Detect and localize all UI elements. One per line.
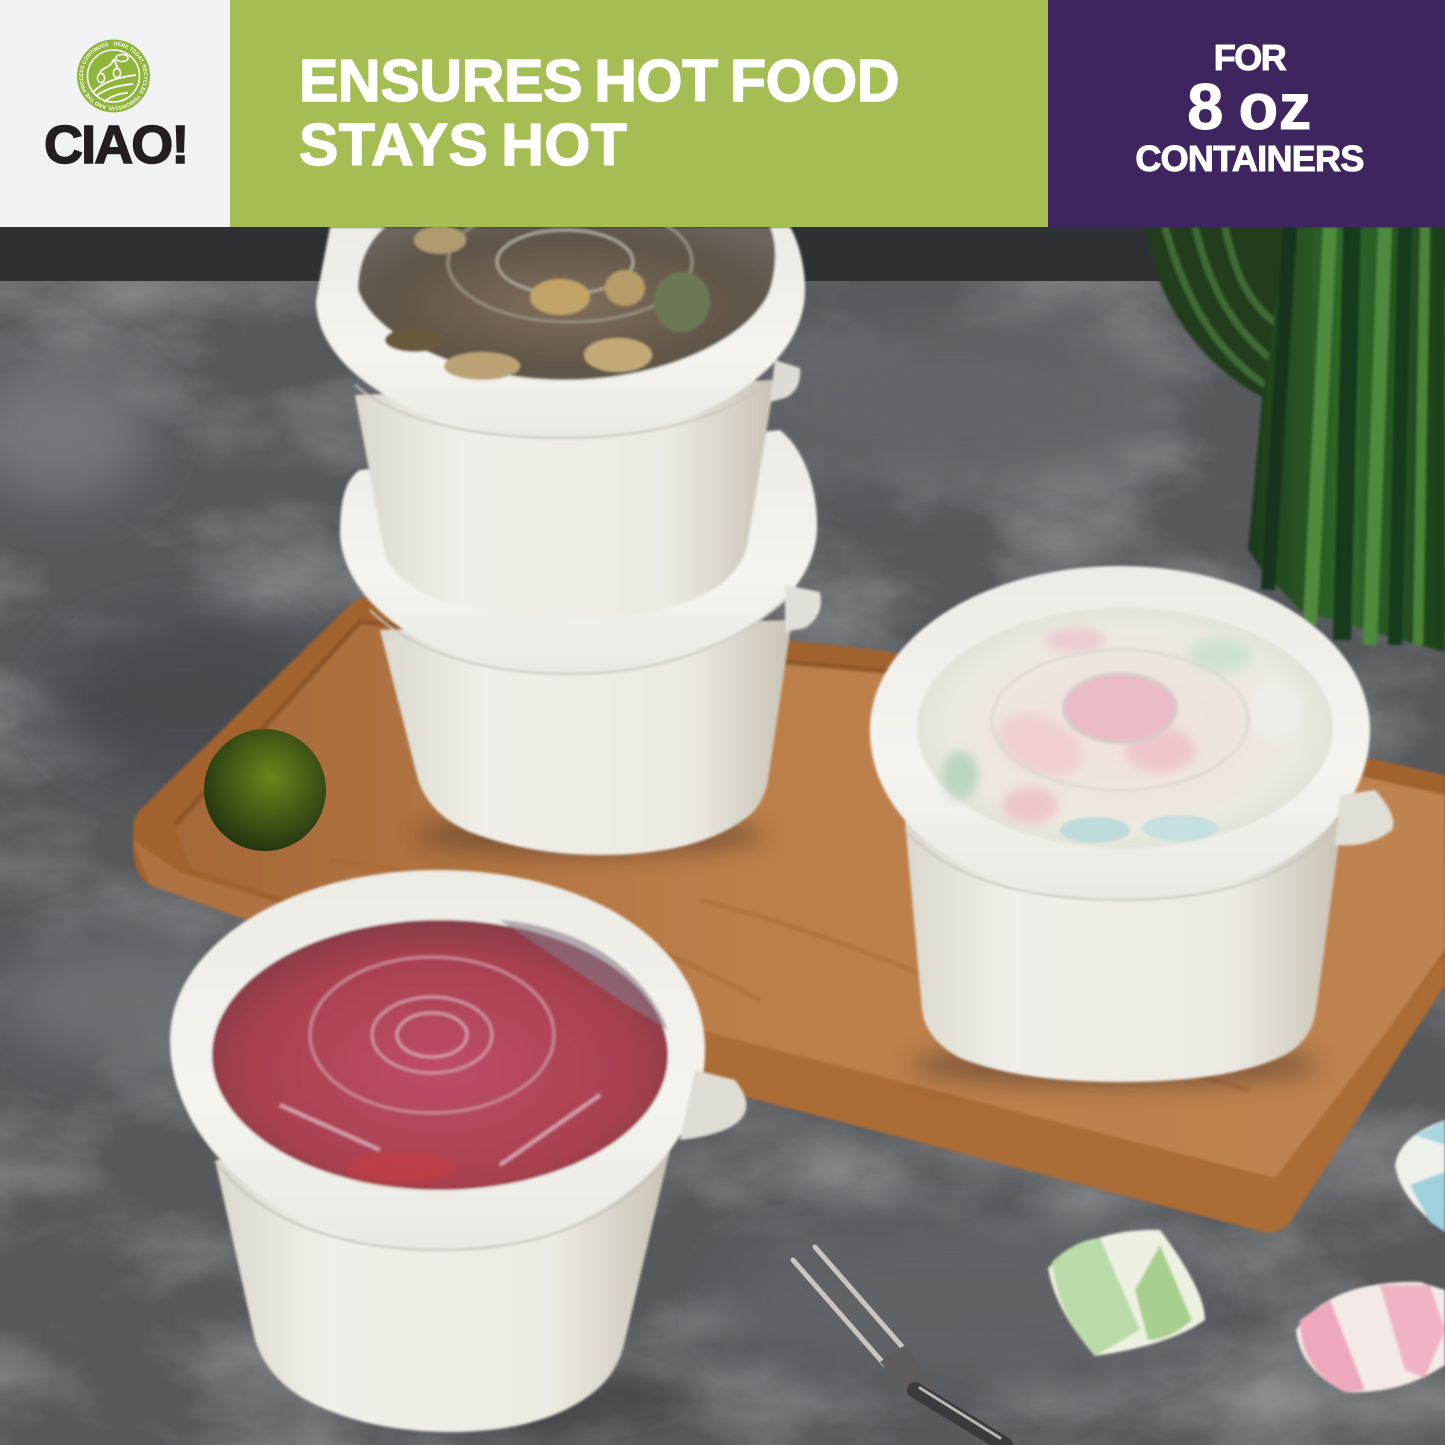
marshmallow: pink: [1296, 1282, 1445, 1392]
size text: CONTAINERS: [1135, 138, 1364, 179]
size text: 8 oz: [1187, 70, 1312, 143]
size panel: [1048, 0, 1445, 227]
wooden tray: [133, 597, 1445, 1232]
fork: [793, 1247, 1005, 1445]
dark wall strip behind table: [0, 227, 1445, 281]
bowl: front with red fruit: [170, 870, 746, 1432]
shadows under bowls: [390, 815, 1320, 1429]
bowl: right with marshmallows: [870, 566, 1393, 1082]
header band: [0, 0, 1445, 227]
logo panel: [0, 0, 230, 227]
green ball: [204, 729, 326, 851]
cactus plant: [1145, 227, 1445, 652]
headline panel: [230, 0, 1048, 227]
headline: [299, 48, 899, 178]
bowl: top stacked: [316, 202, 805, 618]
marshmallow: edge: [1395, 1120, 1445, 1232]
size text: FOR: [1214, 37, 1285, 78]
logo badge: HERE TODAY, RECYCLED TOMORROW, AND THE PROCESS CONTINUES: [79, 42, 148, 110]
size text: [1135, 37, 1364, 179]
bowl: second stacked: [340, 430, 821, 855]
logo wordmark: CIAO!: [44, 115, 187, 175]
headline: ENSURES HOT FOOD: [299, 48, 899, 114]
headline: STAYS HOT: [299, 112, 627, 178]
marshmallow: green: [1048, 1230, 1205, 1356]
